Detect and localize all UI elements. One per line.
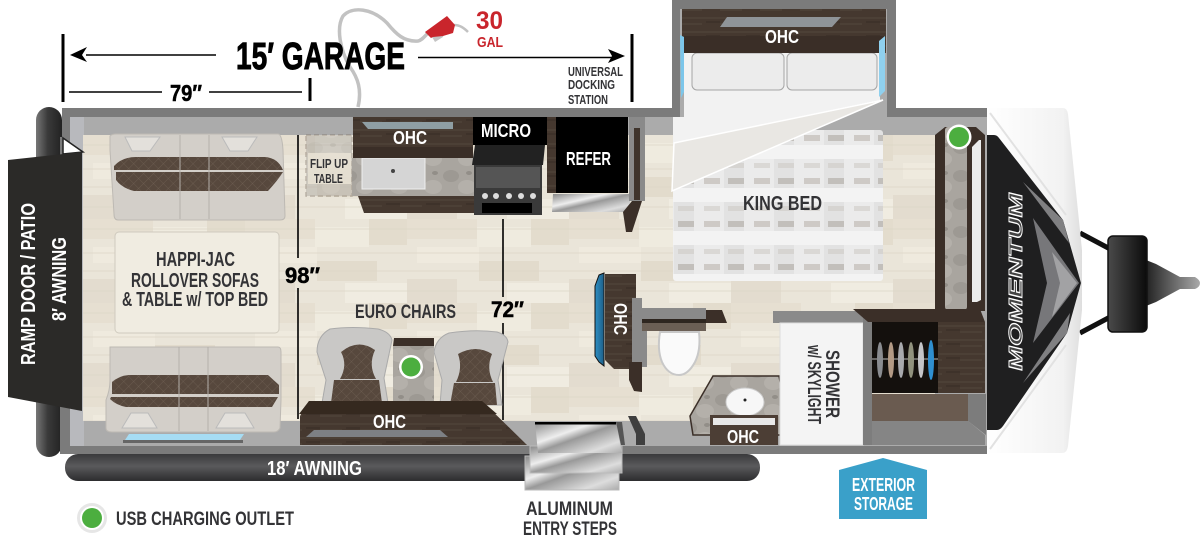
stove <box>474 165 542 215</box>
rear sofa bottom <box>106 347 281 432</box>
table with top bed <box>115 232 279 333</box>
universal docking station label: STATION <box>568 93 608 107</box>
flip up table label: TABLE <box>314 171 343 186</box>
refrigerator <box>552 117 630 212</box>
hanging clothes <box>872 340 938 380</box>
dinette table <box>393 338 434 403</box>
rear corner bracket <box>63 138 83 154</box>
ramp door label: RAMP DOOR / PATIO <box>18 203 40 365</box>
microwave label: MICRO <box>481 121 531 141</box>
entry door <box>616 416 645 445</box>
table label: ROLLOVER SOFAS <box>131 270 259 292</box>
fuel capacity: GAL <box>477 34 503 51</box>
kitchen overhead cabinet <box>353 117 473 158</box>
dimension 79 inch: 79″ <box>170 80 202 106</box>
garage title: 15′ GARAGE <box>236 36 405 78</box>
OHC label: OHC <box>610 303 630 335</box>
bathroom wall <box>629 298 727 392</box>
television cabinet <box>595 273 636 369</box>
flip up table <box>306 135 352 196</box>
aluminum entry steps label: ALUMINUM <box>526 499 613 520</box>
microwave <box>472 117 547 165</box>
bedroom overhead cabinet <box>682 9 886 53</box>
universal docking station label: DOCKING <box>568 78 615 92</box>
trailer walls <box>60 0 987 454</box>
fuel capacity <box>476 7 503 51</box>
dimension 98 inch: 98″ <box>285 263 320 288</box>
table label: HAPPI-JAC <box>156 249 235 271</box>
Momentum logo: MOMENTUM <box>1006 190 1027 373</box>
table label <box>122 249 268 311</box>
bedroom window left <box>680 35 684 98</box>
bedroom window right <box>879 36 885 97</box>
USB outlet front <box>946 124 972 150</box>
rear sofa top <box>110 134 285 220</box>
bathroom overhead cabinet <box>710 415 778 447</box>
dimension 72 inch: 72″ <box>491 297 524 322</box>
floor <box>83 135 935 421</box>
shower label: w/ SKYLIGHT <box>804 344 824 424</box>
shower label <box>804 344 842 424</box>
entry steps <box>525 422 622 490</box>
OHC label: OHC <box>765 27 799 47</box>
euro chairs label: EURO CHAIRS <box>355 302 456 323</box>
18 foot awning <box>65 454 760 481</box>
universal docking station label: UNIVERSAL <box>568 65 623 79</box>
grey graphic <box>1023 182 1079 383</box>
USB charging outlet legend <box>77 503 294 533</box>
refrigerator label: REFER <box>566 149 611 169</box>
USB outlet dinette <box>399 355 423 379</box>
flip up table label <box>310 156 348 186</box>
kitchen partition wall <box>623 117 645 232</box>
closet and storage <box>853 309 986 445</box>
hitch frame <box>1080 233 1200 333</box>
universal docking station label <box>568 65 623 107</box>
king bed <box>672 53 883 281</box>
fuel capacity: 30 <box>476 7 503 35</box>
sink <box>362 158 425 189</box>
fuel hose <box>339 10 428 107</box>
exterior storage callout: EXTERIOR <box>852 475 915 495</box>
aluminum entry steps label: ENTRY STEPS <box>523 519 617 540</box>
shower with skylight <box>773 311 864 445</box>
kitchen counter <box>352 158 474 213</box>
king bed label: KING BED <box>743 193 822 215</box>
pillows <box>692 53 877 90</box>
shower label: SHOWER <box>821 350 842 418</box>
toilet <box>659 332 700 375</box>
8 foot awning label: 8′ AWNING <box>49 237 71 321</box>
garage dimension arrows <box>62 34 634 102</box>
OHC label: OHC <box>373 412 406 432</box>
brown cabinet beside refrigerator <box>547 117 556 193</box>
fuel nozzle icon <box>425 16 468 42</box>
USB charging outlet legend: USB CHARGING OUTLET <box>116 509 294 530</box>
front wardrobe cabinet <box>935 127 985 311</box>
exterior storage callout: STORAGE <box>854 494 913 514</box>
OHC label: OHC <box>393 128 427 148</box>
flip up table label: FLIP UP <box>310 156 348 171</box>
awning label: 18′ AWNING <box>267 458 362 480</box>
bathroom sink counter <box>690 376 790 435</box>
dimension 79 inch <box>69 78 312 106</box>
euro chair left <box>317 328 392 403</box>
OHC label: OHC <box>727 427 759 447</box>
dinette overhead cabinet <box>299 401 527 445</box>
table label: & TABLE w/ TOP BED <box>122 289 268 311</box>
euro chair right <box>434 331 508 405</box>
aluminum entry steps label <box>523 499 617 540</box>
ramp door patio <box>8 152 82 411</box>
window rear <box>123 434 244 443</box>
exterior storage callout <box>839 458 927 519</box>
front cap <box>987 108 1082 453</box>
rear roller tube <box>36 107 62 457</box>
